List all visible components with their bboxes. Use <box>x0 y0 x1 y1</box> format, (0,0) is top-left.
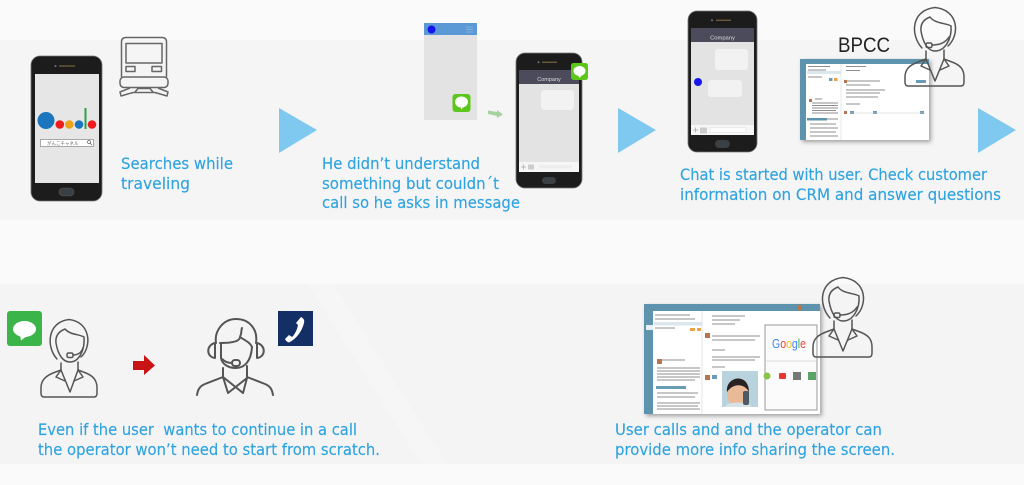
CRM screenshot <box>800 59 929 140</box>
icon: phone badge <box>278 311 313 346</box>
icon: chat badge <box>571 63 588 80</box>
step 1: phone with search page <box>31 56 102 201</box>
label: BPCC: BPCC <box>838 34 890 57</box>
step 2: phone with company chat: Company <box>537 77 561 83</box>
text: user calls: provide more info sharing the screen. <box>615 440 895 459</box>
text: chat is started <box>680 165 1001 204</box>
red arrow <box>133 355 155 375</box>
step 2: web page with chat button <box>424 23 477 120</box>
browser window <box>764 325 817 410</box>
step 3: phone with chat: Company <box>710 36 735 42</box>
icon: train <box>120 38 168 96</box>
browser window: Google <box>772 336 806 351</box>
arrow 2 <box>618 108 656 153</box>
icon: male operator with headset <box>197 319 273 395</box>
text: even if the user <box>38 420 380 459</box>
screen sharing screenshot <box>644 304 820 414</box>
text: he didn't understand: He didn’t understand <box>322 154 480 173</box>
step 3: phone with chat <box>688 11 757 152</box>
icon: green chat badge <box>7 311 42 346</box>
icon: female operator bottom left <box>41 320 97 397</box>
text: even if the user: Even if the user wants to continue in a call <box>38 420 357 439</box>
text: user calls <box>615 420 895 459</box>
text: searches while traveling <box>121 154 233 193</box>
arrow 1 <box>279 108 317 153</box>
arrow 3 <box>978 108 1016 153</box>
step 1: phone with search page: がんこチャネル <box>47 140 79 147</box>
icon: female operator bottom right <box>813 278 872 357</box>
text: he didn't understand <box>322 154 520 212</box>
text: chat is started: Chat is started with user. Check customer <box>680 165 987 184</box>
bottom band <box>0 284 1024 464</box>
text: chat is started: information on CRM and answer questions <box>680 185 1001 204</box>
photo: smiling woman on the phone <box>722 371 758 407</box>
step 2: phone with company chat <box>516 53 582 188</box>
text: he didn't understand: something but couldn´t <box>322 174 499 193</box>
icon: female operator top <box>905 8 964 86</box>
small green arrow <box>488 110 503 118</box>
text: user calls: User calls and and the operator can <box>615 420 882 439</box>
text: searches while traveling: Searches while <box>121 154 233 173</box>
text: even if the user: the operator won’t need to start from scratch. <box>38 440 380 459</box>
top band <box>0 40 1024 220</box>
text: he didn't understand: call so he asks in message <box>322 193 520 212</box>
text: searches while traveling: traveling <box>121 174 190 193</box>
